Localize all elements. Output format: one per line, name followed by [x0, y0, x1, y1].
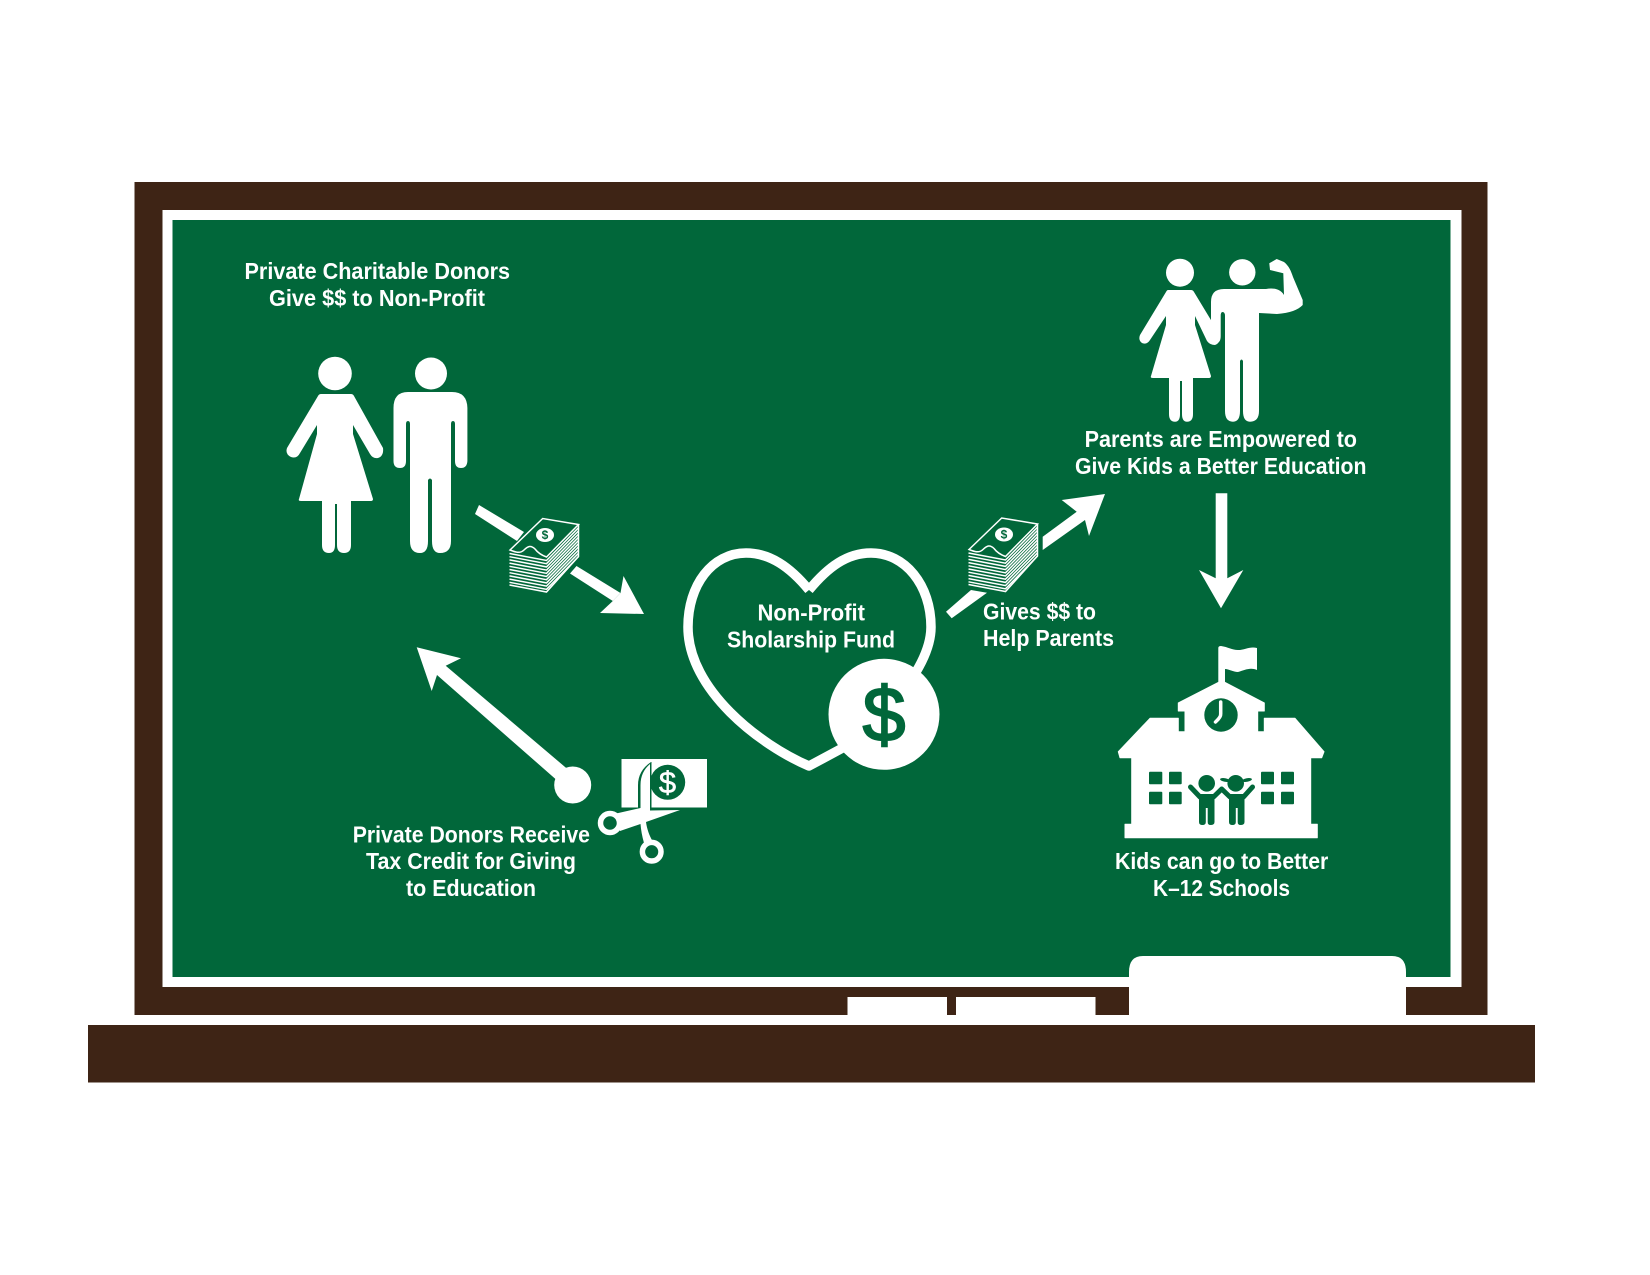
label: gives money to parents: Help Parents [983, 625, 1114, 651]
label: better schools: K–12 Schools [1153, 875, 1290, 901]
bill dollar coin [650, 765, 685, 800]
arrow: donors to fund [475, 505, 644, 614]
icon: donor couple [286, 357, 467, 553]
icon: scissors cutting bill: $ [659, 765, 676, 800]
icon: scissors cutting bill [600, 759, 707, 861]
label: gives money to parents: Gives $$ to [983, 598, 1096, 624]
label: tax credit [353, 822, 590, 901]
chalk stick left [848, 997, 947, 1025]
building [1118, 718, 1324, 838]
dollar coin [828, 659, 940, 770]
arrow: fund to parents [946, 494, 1105, 618]
white board border [162, 210, 1462, 987]
donor man [394, 358, 467, 553]
dollar sign: $ [863, 672, 905, 758]
board frame [134, 182, 1488, 1015]
icon: empowered parents [1139, 259, 1303, 422]
heart: non-profit scholarship fund [688, 553, 940, 770]
label: parents empowered: Give Kids a Better Education [1075, 453, 1366, 479]
arrow: parents to schools [1199, 493, 1243, 608]
windows [1149, 772, 1294, 804]
chalk stick right [956, 997, 1096, 1025]
bill [622, 759, 707, 808]
eraser [1129, 956, 1406, 1025]
cupola [1178, 681, 1264, 735]
label: tax credit: Tax Credit for Giving [366, 848, 576, 874]
label: better schools: Kids can go to Better [1115, 848, 1328, 874]
scissor blade outline [638, 762, 652, 808]
green board surface [172, 220, 1450, 977]
heart outline [688, 553, 931, 766]
flag [1218, 646, 1257, 685]
icon: money stack right [968, 518, 1038, 592]
fund label: Non-Profit [758, 600, 865, 626]
two children [1190, 775, 1252, 825]
label: tax credit: Private Donors Receive [353, 822, 590, 848]
heading: private donors: Private Charitable Donors [244, 258, 510, 284]
chalkboard [88, 182, 1535, 1082]
arrow: tax credit back to donors [417, 647, 591, 804]
fund label: Sholarship Fund [727, 627, 895, 653]
label: better schools [1115, 848, 1328, 901]
parent man flexing [1211, 259, 1303, 422]
label: parents empowered: Parents are Empowered to [1085, 426, 1357, 452]
icon: money stack left [510, 518, 578, 592]
scissors [600, 764, 680, 861]
donor woman [286, 357, 383, 553]
label: parents empowered [1075, 426, 1366, 479]
parent woman [1139, 259, 1220, 422]
icon: school [1118, 646, 1324, 838]
clock [1204, 698, 1238, 732]
icon: money stack left: $ [542, 528, 549, 542]
fund label [727, 600, 895, 653]
label: gives money to parents [983, 598, 1114, 651]
heading: private donors: Give $$ to Non-Profit [269, 285, 485, 311]
icon: money stack right: $ [1001, 528, 1008, 542]
label: tax credit: to Education [406, 875, 536, 901]
chalk ledge [88, 1025, 1535, 1082]
heading: private donors [244, 258, 510, 311]
